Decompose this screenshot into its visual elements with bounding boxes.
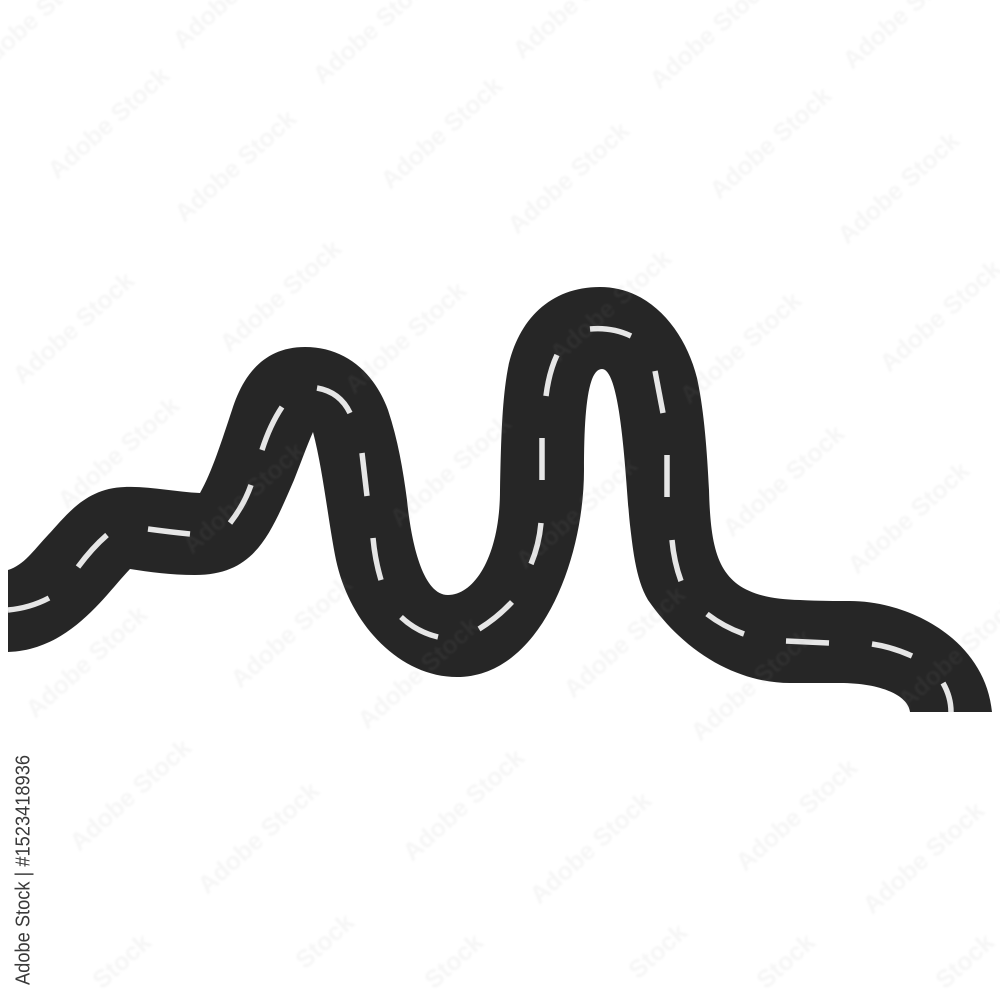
stock photo watermark pattern: Adobe Stock: [385, 409, 517, 533]
stock photo watermark pattern: Adobe Stock: [21, 600, 153, 724]
stock photo watermark pattern: Adobe Stock: [675, 286, 807, 410]
stock photo watermark pattern: Adobe Stock: [833, 126, 965, 250]
stock photo watermark pattern: Adobe Stock: [858, 796, 990, 920]
stock photo watermark pattern: Adobe Stock: [843, 456, 975, 580]
stock photo watermark pattern: Adobe Stock: [226, 570, 358, 694]
stock photo watermark pattern: Stock: [290, 908, 360, 974]
stock photo watermark pattern: Adobe Stock: [53, 391, 185, 515]
stock photo watermark pattern: Stock: [751, 928, 821, 994]
road centre dashes: [8, 329, 951, 712]
stock photo watermark pattern: Adobe Stock: [398, 743, 530, 867]
stock photo watermark pattern: Adobe Stock: [8, 266, 140, 390]
stock photo watermark pattern: Adobe Stock: [686, 623, 818, 747]
stock photo watermark pattern: Adobe Stock: [193, 776, 325, 900]
stock photo watermark pattern: Adobe Stock: [705, 81, 837, 205]
stock photo watermark pattern: Adobe Stock: [559, 580, 691, 704]
stock photo watermark pattern: Adobe Stock: [215, 234, 347, 358]
stock photo watermark pattern: Adobe Stock: [170, 104, 302, 228]
stock photo watermark pattern: Adobe Stock: [353, 611, 485, 735]
stock photo watermark pattern: Adobe Stock: [376, 71, 508, 195]
stock photo watermark pattern: Adobe Stock: [178, 436, 310, 560]
stock photo watermark pattern: Adobe Stock: [718, 419, 850, 543]
vertical stock credit text: Adobe Stock | #1523418936: [12, 755, 34, 985]
stock photo watermark pattern: Stock: [623, 918, 693, 984]
stock photo watermark pattern: Adobe Stock: [340, 276, 472, 400]
stock photo watermark pattern: Adobe Stock: [503, 116, 635, 240]
stock photo watermark pattern: Stock: [419, 928, 489, 994]
stock photo watermark pattern: Adobe Stock: [511, 451, 643, 575]
stock photo watermark pattern: Adobe Stock: [65, 733, 197, 857]
stock photo watermark pattern: Adobe Stock: [43, 61, 175, 185]
stock photo watermark pattern: Adobe Stock: [545, 244, 677, 368]
road surface: [8, 287, 992, 712]
stock photo watermark pattern: Adobe Stock: [731, 753, 863, 877]
stock photo watermark pattern: Stock: [930, 928, 1000, 994]
stock photo watermark pattern: Stock: [87, 928, 157, 994]
stock photo watermark pattern: Adobe Stock: [525, 786, 657, 910]
